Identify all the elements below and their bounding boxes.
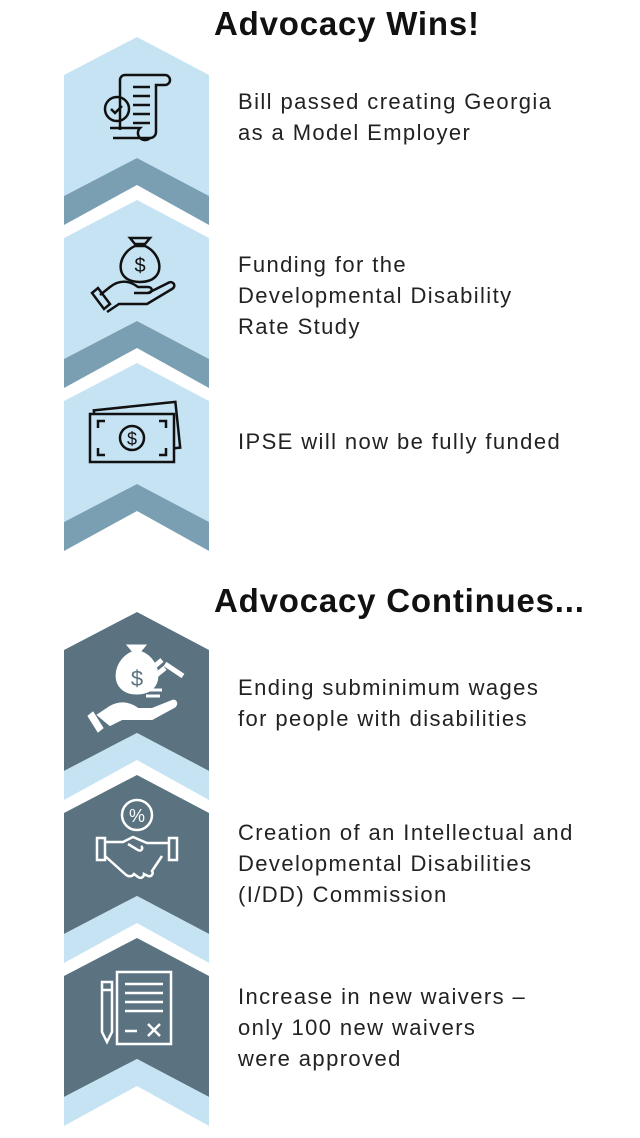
chevron 2 (64, 200, 209, 388)
text: rate study: Developmental Disability (238, 283, 512, 308)
text: rate study (238, 252, 512, 339)
icon: cash bills: $ (127, 429, 137, 449)
icon: money bag gavel hand: $ (131, 666, 143, 691)
text: IPSE: IPSE will now be fully funded (238, 429, 561, 454)
icon: money bag in hand: $ (134, 255, 146, 277)
text: subminimum wages: Ending subminimum wages (238, 675, 539, 700)
text: waivers: Increase in new waivers – (238, 984, 526, 1009)
chevron 3 (64, 363, 209, 551)
chevron 1 (64, 37, 209, 225)
text: waivers (238, 984, 526, 1071)
text: I/DD commission (238, 820, 574, 907)
text: rate study: Funding for the (238, 252, 407, 277)
icon: cash bills (90, 402, 180, 462)
text: model employer (238, 89, 552, 145)
icon: handshake percent (97, 800, 177, 878)
text: subminimum wages: for people with disabilities (238, 706, 528, 731)
text: waivers: were approved (238, 1046, 402, 1071)
icon: handshake percent: % (129, 806, 145, 826)
text: I/DD commission: Creation of an Intellectual and (238, 820, 574, 845)
icon: money bag in hand (92, 238, 174, 312)
chevron 5 (64, 775, 209, 963)
text: I/DD commission: Developmental Disabilities (238, 851, 532, 876)
icon: document pencil (102, 972, 171, 1044)
text: subminimum wages (238, 675, 539, 731)
icon: bill scroll (105, 75, 170, 140)
icon: money bag gavel hand (88, 645, 183, 732)
text: waivers: only 100 new waivers (238, 1015, 476, 1040)
text: rate study: Rate Study (238, 314, 361, 339)
text: model employer: Bill passed creating Georgia (238, 89, 552, 114)
title: advocacy wins: Advocacy Wins! (214, 5, 480, 42)
title: advocacy continues: Advocacy Continues... (214, 582, 585, 619)
chevron 6 (64, 938, 209, 1126)
text: I/DD commission: (I/DD) Commission (238, 882, 448, 907)
chevron 4 (64, 612, 209, 800)
text: model employer: as a Model Employer (238, 120, 471, 145)
